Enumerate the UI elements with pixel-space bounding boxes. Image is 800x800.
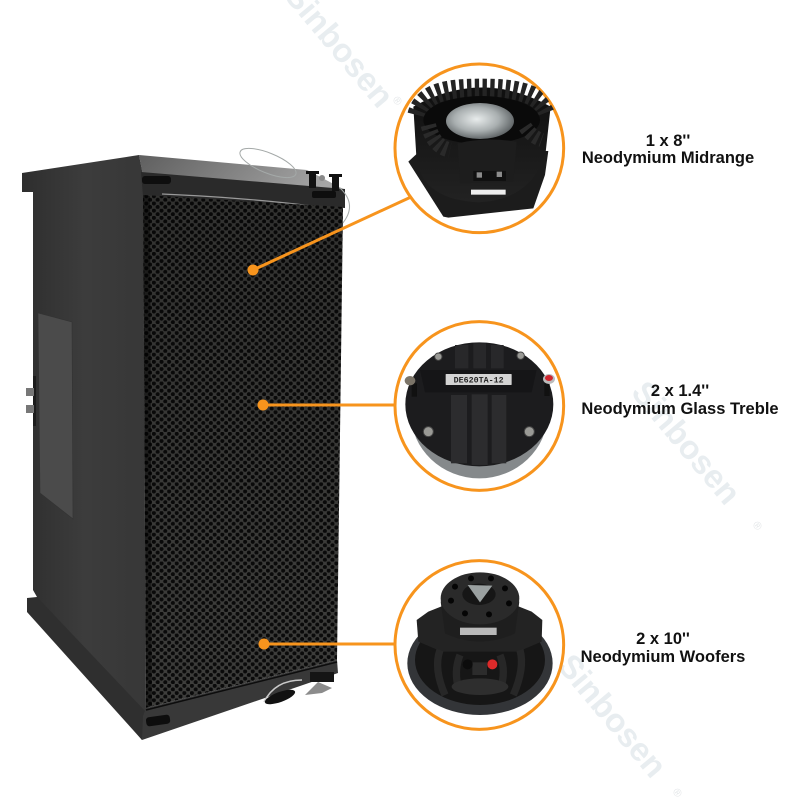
basket shoulder (417, 605, 542, 652)
label: midrange: Neodymium Midrange (582, 149, 754, 167)
magnet top plate (441, 572, 519, 624)
watermarks: ® (670, 786, 684, 800)
watermarks: Sinbosen (551, 647, 674, 784)
circle: midrange driver (395, 64, 564, 233)
vent holes (448, 575, 512, 617)
mounting plate (408, 151, 548, 218)
basket arms (438, 650, 521, 695)
cabinet top surface (139, 155, 345, 198)
cone visible below (452, 678, 508, 695)
centre band (420, 370, 537, 392)
label: woofers: Neodymium Woofers (581, 648, 745, 666)
black terminal (405, 376, 417, 397)
top front rail (141, 172, 345, 208)
label: midrange (582, 132, 754, 167)
callout line: treble (258, 400, 394, 410)
terminal plate (472, 662, 487, 675)
bottom front rail (142, 660, 338, 740)
magnet cylinder (440, 602, 520, 606)
lower ribs (451, 394, 506, 465)
rigging wire loop (236, 142, 350, 224)
circle: woofer driver (395, 561, 564, 729)
label: midrange: 1 x 8'' (646, 132, 690, 150)
callout line: woofers (258, 638, 394, 650)
top ribs (455, 343, 504, 368)
magnet sticker (460, 628, 497, 635)
red terminal (487, 659, 497, 669)
label: woofers: 2 x 10'' (636, 630, 690, 648)
side rigging bracket (26, 376, 36, 426)
label: treble: Neodymium Glass Treble (581, 400, 779, 418)
label: treble (581, 382, 779, 418)
model label: DE620TA-12 (454, 375, 504, 385)
rear access plate (38, 313, 73, 519)
speaker cabinet (22, 142, 350, 740)
heatsink fins (417, 88, 548, 115)
watermarks (278, 0, 764, 800)
carrying strap and clip (263, 672, 334, 707)
label: treble: 2 x 1.4'' (651, 382, 709, 400)
outer basket rim (407, 636, 553, 715)
cabinet base plinth (27, 597, 146, 740)
terminal block (473, 171, 506, 181)
callout line: midrange (248, 197, 411, 276)
watermarks: ® (390, 94, 404, 108)
mounting screws (423, 352, 534, 437)
compression driver housing (405, 342, 553, 466)
watermarks: Sinbosen (625, 374, 748, 511)
model label (446, 374, 512, 385)
phase plug (462, 584, 496, 605)
chrome dome (446, 103, 514, 139)
circle: treble driver (395, 322, 564, 490)
watermarks: ® (750, 519, 764, 533)
cabinet side panel (22, 155, 146, 740)
cylindrical heatsink body (413, 88, 550, 154)
model sticker (471, 190, 506, 195)
chrome base ring (414, 434, 544, 478)
label: woofers (581, 630, 745, 666)
front recess (462, 140, 510, 144)
rigging knobs (306, 171, 342, 191)
red terminal (543, 374, 555, 396)
black terminal (463, 659, 473, 669)
front perforated grille (143, 195, 343, 708)
